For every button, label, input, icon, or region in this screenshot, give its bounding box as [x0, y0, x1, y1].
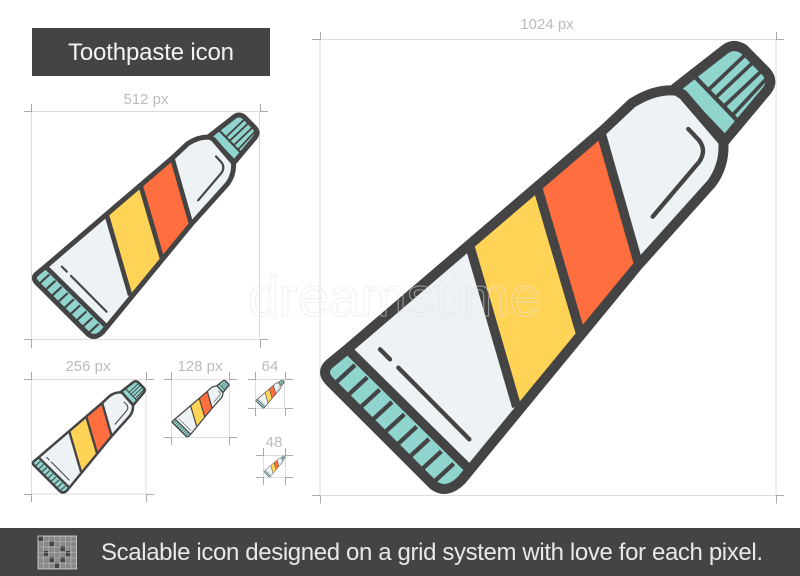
128 px label: 128 px — [177, 358, 223, 375]
512 px label: 512 px — [123, 91, 169, 108]
1024 px label: 1024 px — [520, 16, 574, 33]
48 px toothpaste icon — [264, 456, 285, 477]
256 px icon frame — [24, 372, 154, 502]
1024 px toothpaste icon — [325, 46, 770, 489]
512 px icon frame — [24, 104, 268, 348]
footer bar — [0, 528, 800, 576]
watermark: dreamstime — [248, 265, 541, 328]
48 px icon frame — [256, 448, 293, 485]
footer tagline: Scalable icon designed on a grid system with love for each pixel. — [101, 539, 763, 566]
48 px label: 48 — [266, 434, 282, 451]
256 px label: 256 px — [65, 358, 111, 375]
256 px toothpaste icon — [33, 381, 145, 492]
title banner — [32, 28, 270, 76]
128 px toothpaste icon — [172, 380, 229, 437]
title banner: Toothpaste icon — [68, 39, 234, 66]
64 px toothpaste icon — [256, 380, 284, 408]
icon: pixel grid — [38, 536, 76, 569]
512 px toothpaste icon — [34, 115, 257, 337]
1024 px icon frame — [312, 32, 784, 504]
64 px icon frame — [248, 372, 293, 416]
128 px icon frame — [164, 372, 237, 445]
64 px label: 64 — [262, 358, 278, 375]
